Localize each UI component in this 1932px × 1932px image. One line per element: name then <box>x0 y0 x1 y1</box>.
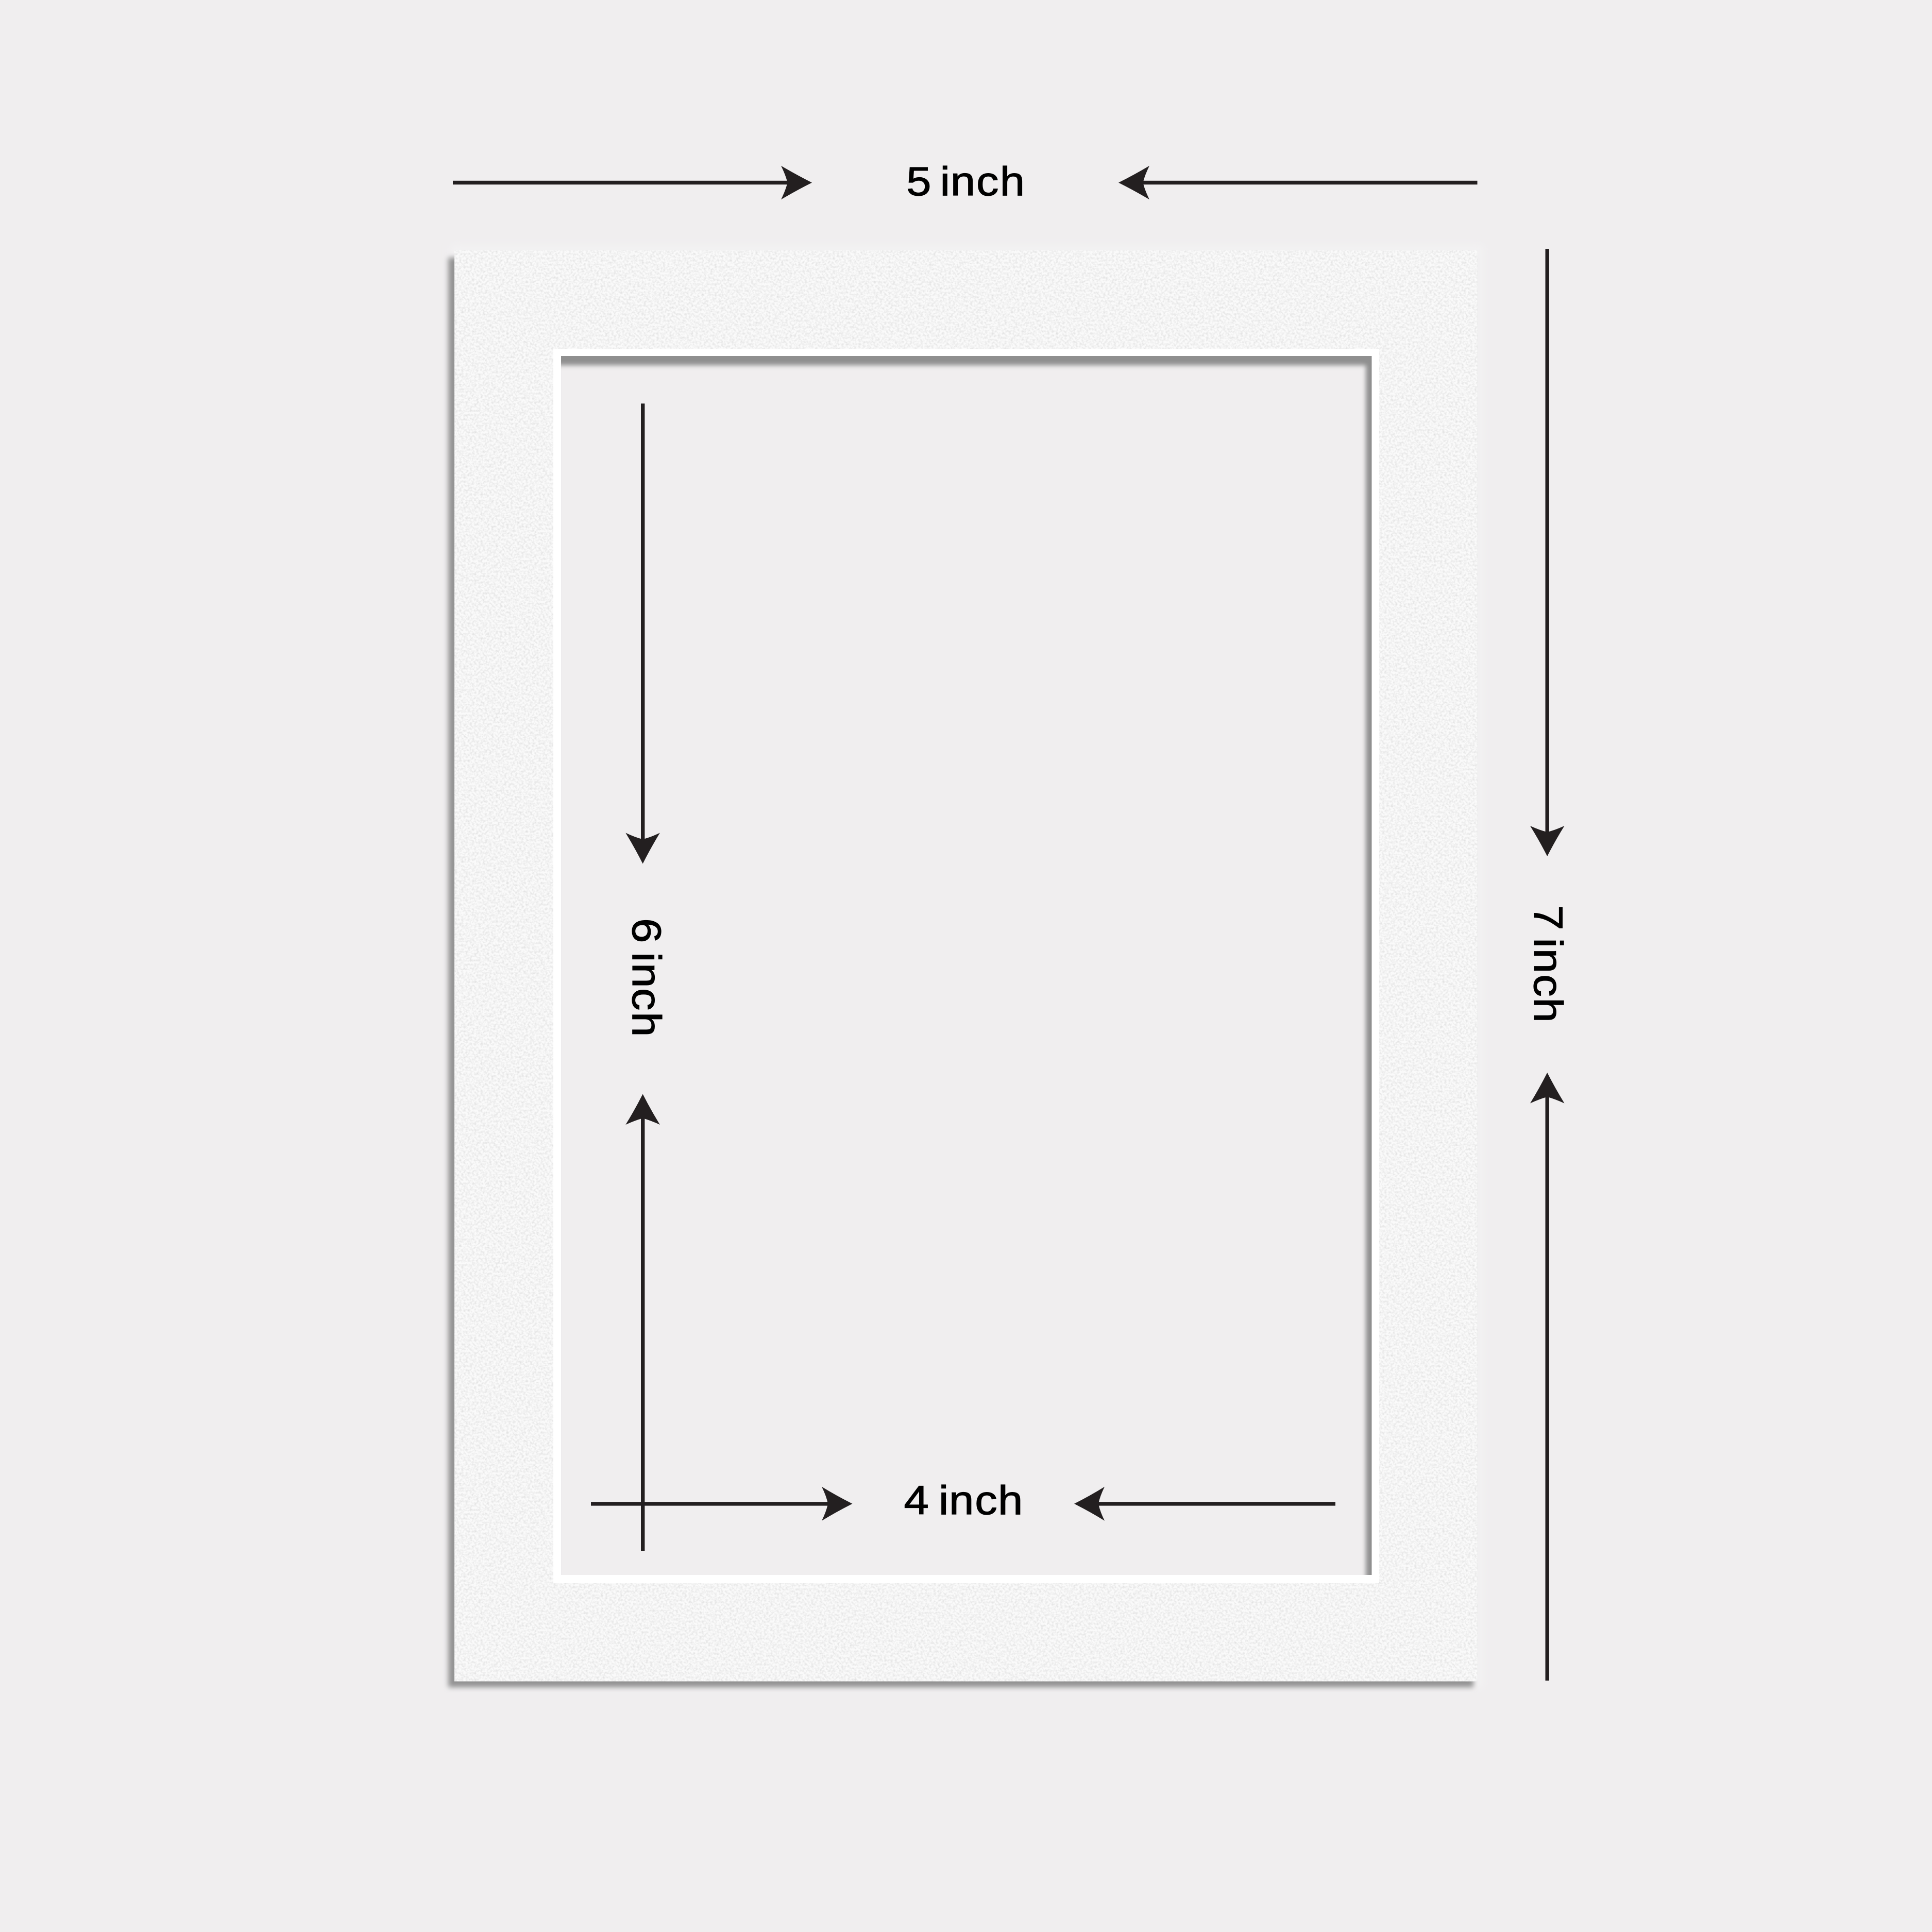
label: 5 inch: 5 inch <box>906 158 1025 204</box>
mat paper grain <box>454 250 1478 1682</box>
inner shadow of the opening <box>561 356 1371 1575</box>
label: 7 inch: 7 inch <box>1526 905 1571 1023</box>
mat surface <box>454 250 1478 1682</box>
mat drop shadow <box>448 258 1473 1687</box>
arrow: 6 inch down <box>625 403 660 863</box>
arrow: 6 inch up <box>625 1094 660 1551</box>
opening <box>561 356 1371 1575</box>
mat outer glow <box>451 245 1484 1688</box>
label: 6 inch: 6 inch <box>624 918 670 1037</box>
arrow: 7 inch down <box>1530 249 1564 856</box>
white bevel of the opening <box>553 349 1379 1583</box>
arrow: 4 inch left <box>591 1487 852 1521</box>
panel: photo mat board <box>448 245 1484 1688</box>
arrow: 5 inch left <box>453 166 812 199</box>
label: 4 inch: 4 inch <box>904 1477 1023 1523</box>
arrow: 7 inch up <box>1530 1073 1564 1681</box>
arrow: 4 inch right <box>1074 1487 1335 1521</box>
arrow: 5 inch right <box>1118 166 1478 199</box>
